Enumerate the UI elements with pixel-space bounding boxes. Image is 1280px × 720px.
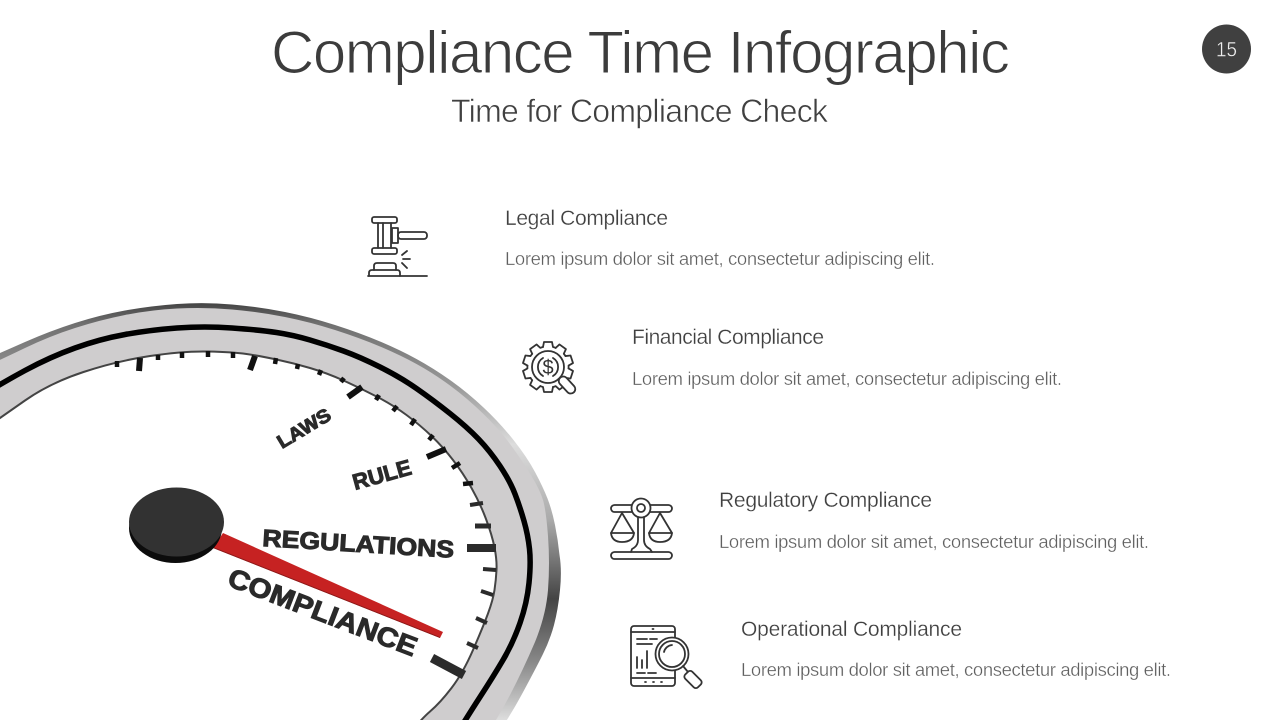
page number badge [1202,24,1251,74]
gauge white face [0,351,497,720]
description: Lorem ipsum dolor sit amet, consectetur adipiscing elit. [505,248,935,269]
description: Lorem ipsum dolor sit amet, consectetur adipiscing elit. [632,368,1062,389]
heading: Regulatory Compliance [719,489,932,512]
icon: dollar sign: $ [542,357,554,379]
icon: gear with dollar and magnifier [522,342,577,395]
gauge metal rim [0,303,561,720]
item: financial compliance [522,326,1062,395]
item: operational compliance [631,618,1171,689]
gauge grey band [0,308,549,720]
heading: Financial Compliance [632,326,824,349]
gauge label: regulations: REGULATIONS [262,525,455,564]
heading: Operational Compliance [741,618,962,641]
page number badge: 15 [1216,38,1237,62]
icon: gavel [368,217,427,276]
item: regulatory compliance [611,489,1149,559]
icon: balance scales [611,498,672,559]
icon: tablet with magnifier [631,626,703,689]
subtitle: Time for Compliance Check [451,93,829,129]
heading: Legal Compliance [505,207,668,230]
gauge label: laws: LAWS [274,405,335,453]
gauge hub [129,488,224,563]
gauge black ring [0,327,530,720]
description: Lorem ipsum dolor sit amet, consectetur adipiscing elit. [741,659,1171,680]
item: legal compliance [368,207,935,276]
gauge tick marks [117,351,496,675]
gauge label: rule: RULE [350,455,414,495]
gauge dial [0,303,561,720]
description: Lorem ipsum dolor sit amet, consectetur adipiscing elit. [719,531,1149,552]
title: Compliance Time Infographic [271,19,1010,86]
gauge label: compliance: COMPLIANCE [224,563,421,662]
gauge needle [213,533,443,638]
